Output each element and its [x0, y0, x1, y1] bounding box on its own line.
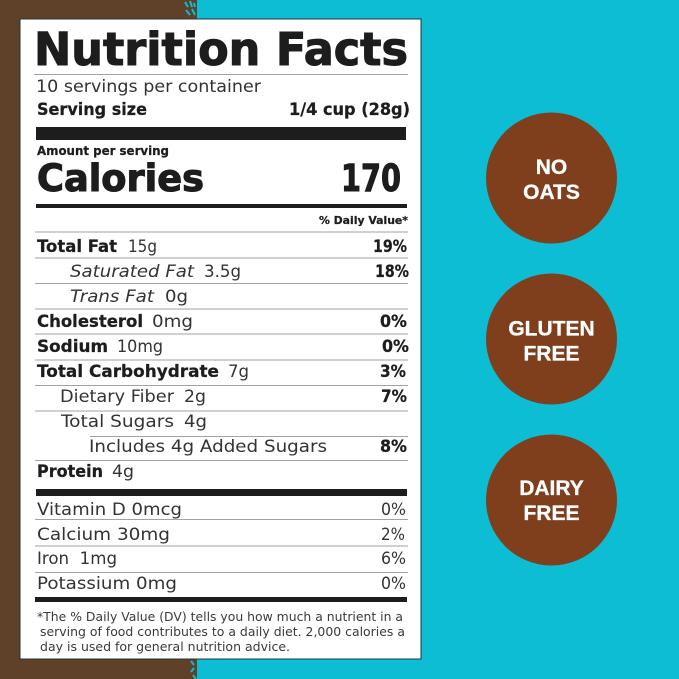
- total carbohydrate: [37, 362, 406, 382]
- badge: no oats: OATS: [523, 181, 580, 204]
- cholesterol: 0%: [380, 312, 407, 332]
- total carbohydrate: 3%: [380, 362, 406, 382]
- footnote: *The % Daily Value (DV) tells you how much a nutrient in a: [37, 609, 403, 624]
- potassium: Potassium 0mg: [37, 574, 177, 594]
- trans fat: [70, 287, 188, 307]
- badge: no oats: [486, 112, 617, 244]
- sodium: [37, 337, 409, 357]
- calcium: [37, 525, 405, 545]
- badge: dairy free: DAIRY: [519, 477, 584, 500]
- servings per container: 10 servings per container: [36, 77, 261, 97]
- saturated fat: 3.5g: [204, 262, 241, 282]
- saturated fat: 18%: [375, 262, 409, 282]
- calcium: 2%: [381, 525, 405, 545]
- cholesterol: Cholesterol: [37, 312, 143, 332]
- footnote: serving of food contributes to a daily diet. 2,000 calories a: [40, 624, 405, 639]
- total fat: [37, 237, 407, 257]
- serving size row: Serving size: [37, 100, 147, 120]
- nutrition facts panel: [20, 19, 421, 659]
- total fat: Total Fat: [37, 237, 117, 257]
- calories row: [37, 157, 401, 200]
- potassium: [37, 574, 406, 594]
- iron: Iron 1mg: [37, 549, 117, 569]
- dietary fiber: 2g: [184, 387, 206, 407]
- added sugars: Includes 4g Added Sugars: [89, 437, 327, 457]
- total sugars: 4g: [184, 412, 207, 432]
- sodium: 10mg: [117, 337, 163, 357]
- dietary fiber: Dietary Fiber: [60, 387, 174, 407]
- iron: [37, 549, 406, 569]
- protein: 4g: [112, 462, 134, 482]
- total carbohydrate: 7g: [228, 362, 249, 382]
- amount per serving: Amount per serving: [37, 143, 169, 158]
- total fat: 15g: [128, 237, 157, 257]
- total carbohydrate: Total Carbohydrate: [37, 362, 219, 382]
- vitamin d: [37, 500, 406, 520]
- badge: no oats: NO: [536, 156, 567, 179]
- potassium: 0%: [381, 574, 406, 594]
- added sugars: [89, 437, 407, 457]
- dietary fiber: [60, 387, 407, 407]
- protein: Protein: [37, 462, 103, 482]
- vitamin d: 0%: [381, 500, 406, 520]
- badge: dairy free: [486, 434, 617, 566]
- calcium: Calcium 30mg: [37, 525, 170, 545]
- trans fat: Trans Fat: [70, 287, 155, 307]
- dietary fiber: 7%: [381, 387, 407, 407]
- cholesterol: [37, 312, 407, 332]
- badge: gluten free: FREE: [523, 342, 580, 366]
- calories row: Calories: [37, 157, 204, 200]
- total sugars: Total Sugars: [60, 412, 174, 432]
- saturated fat: [70, 262, 409, 282]
- trans fat: 0g: [165, 287, 188, 307]
- sodium: 0%: [382, 337, 409, 357]
- footnote: day is used for general nutrition advice.: [40, 639, 290, 654]
- nutrient rows: [35, 237, 409, 482]
- saturated fat: Saturated Fat: [70, 262, 195, 282]
- sodium: Sodium: [37, 337, 108, 357]
- daily value header: % Daily Value*: [319, 214, 408, 227]
- badge: gluten free: [486, 274, 617, 404]
- vitamin d: Vitamin D 0mcg: [37, 500, 182, 520]
- added sugars: 8%: [380, 437, 407, 457]
- footnote: [37, 609, 405, 654]
- serving size row: 1/4 cup (28g): [289, 100, 410, 120]
- total fat: 19%: [373, 237, 407, 257]
- serving size row: [37, 100, 410, 120]
- calories row: 170: [341, 157, 401, 200]
- iron: 6%: [381, 549, 406, 569]
- badge: gluten free: GLUTEN: [508, 318, 595, 340]
- cholesterol: 0mg: [152, 312, 193, 332]
- title: Nutrition Facts: [34, 23, 408, 76]
- vitamins and minerals: [35, 500, 408, 594]
- badge: dairy free: FREE: [523, 502, 580, 525]
